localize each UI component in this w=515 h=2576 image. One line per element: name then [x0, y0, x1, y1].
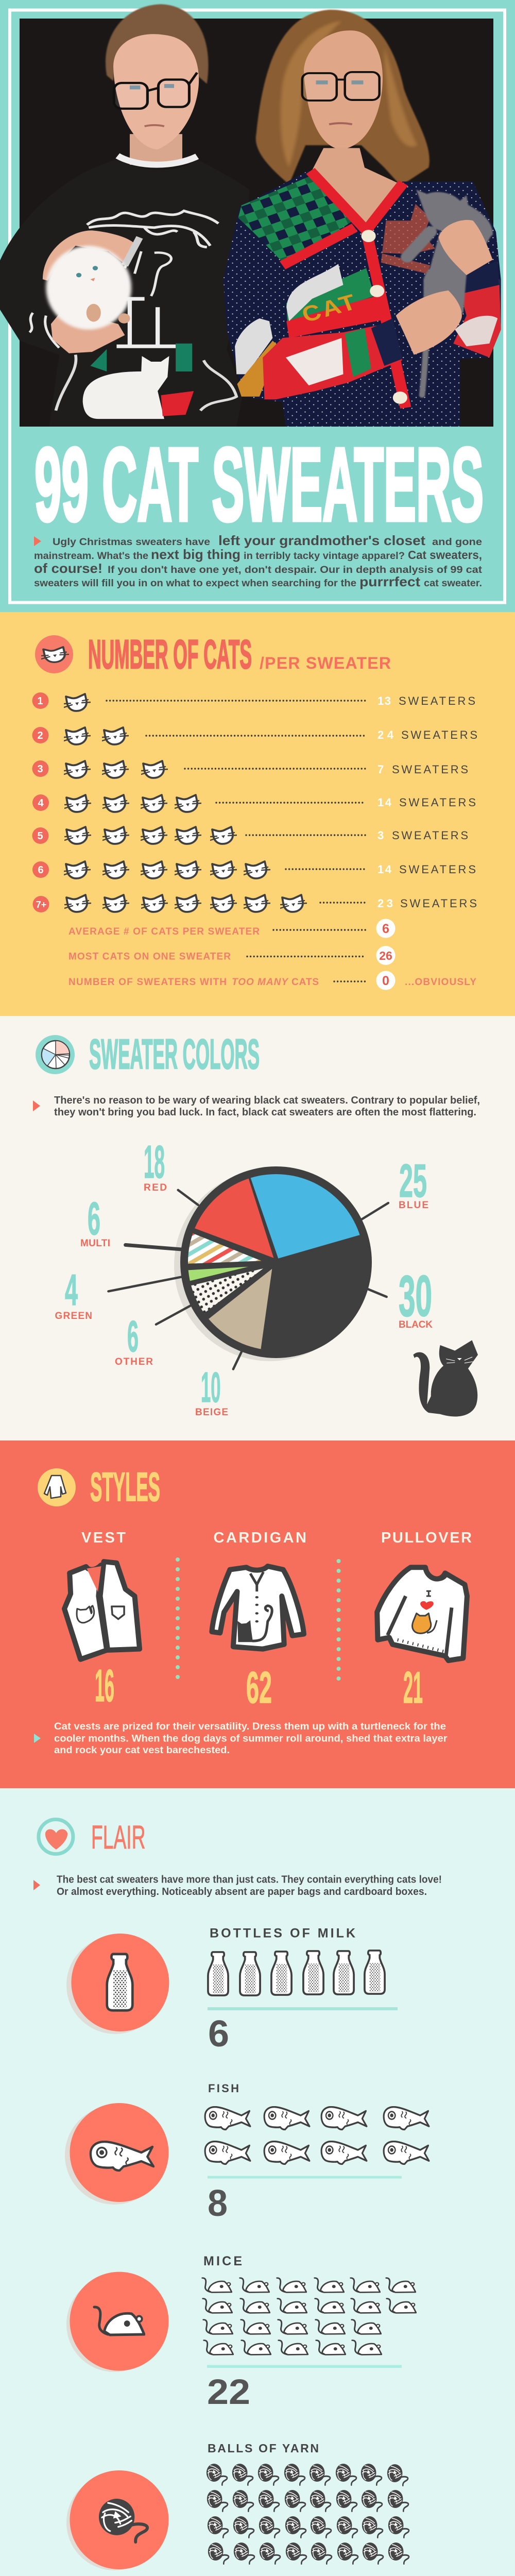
- frilly collar: [117, 156, 197, 165]
- style counts: 16: [95, 1660, 114, 1711]
- row: 2 cats: [32, 727, 477, 744]
- row: 1 cat: [32, 692, 475, 711]
- row: 4 cats: SWEATERS: [399, 796, 476, 809]
- sweater flourishes: [56, 354, 236, 411]
- CAT lettering: CAT: [298, 289, 361, 327]
- pie label: blue 25: BLUE: [399, 1200, 428, 1211]
- stat: average cats: [68, 919, 396, 938]
- pie label: green 4: GREEN: [55, 1311, 92, 1321]
- stat: most cats: [68, 946, 396, 965]
- icon: cardigan badge: [38, 1468, 76, 1506]
- panel: number of cats: [0, 612, 515, 1016]
- intro paragraph: Cat sweaters,: [408, 548, 482, 562]
- stat: most cats: MOST CATS ON ONE SWEATER: [68, 951, 231, 962]
- paragraph: flair: Or almost everything. Noticeably absent are paper bags and cardboard boxes.: [57, 1886, 427, 1897]
- row: 7+ cats: [33, 895, 477, 912]
- stat: too many cats: CATS: [291, 977, 319, 988]
- row: bottles of milk: BOTTLES OF MILK: [210, 1926, 355, 1940]
- stat: average cats: AVERAGE # OF CATS PER SWEATER: [68, 926, 260, 937]
- intro paragraph: mainstream. What's the: [34, 551, 148, 562]
- pie label: green 4: [55, 1266, 92, 1321]
- row: 6 cats: [32, 861, 476, 878]
- row: mice: 22: [207, 2372, 250, 2412]
- panel: styles: 21: [403, 1663, 423, 1713]
- paragraph: vests: [54, 1721, 448, 1756]
- stat: too many cats: [68, 971, 476, 990]
- pie label: red 18: [144, 1137, 167, 1193]
- leader lines: [108, 1190, 388, 1369]
- style counts: 62: [246, 1663, 272, 1713]
- plush white cat: [46, 246, 131, 330]
- row: balls of yarn: [66, 2442, 409, 2576]
- row: bottles of milk: [66, 1926, 398, 2055]
- sweater greenery: [90, 344, 192, 371]
- pie label: other 6: OTHER: [115, 1357, 153, 1367]
- intro paragraph: [34, 533, 483, 589]
- heading: flair: FLAIR: [91, 1819, 145, 1856]
- panel: flair: [0, 1788, 515, 2576]
- paragraph: black sweaters: There's no reason to be wary of wearing black cat sweaters. Contrary to popular belief,: [54, 1095, 480, 1106]
- panel: sweater colors: SWEATER COLORS: [89, 1031, 260, 1078]
- row: 5 cats: 5: [37, 831, 43, 842]
- panel: sweater colors: 18: [144, 1137, 165, 1188]
- intro paragraph: cat sweater.: [424, 578, 482, 589]
- pie label: red 18: RED: [144, 1182, 167, 1193]
- row: mice: MICE: [203, 2254, 242, 2268]
- panel: sweater colors: [0, 1016, 515, 1440]
- left man hair: [106, 4, 209, 84]
- row: fish: 8: [208, 2183, 228, 2224]
- row: 1 cat: 1: [37, 696, 43, 707]
- plush paws and face: [87, 304, 101, 321]
- row: 4 cats: 14: [377, 796, 392, 809]
- column titles: VEST: [81, 1530, 126, 1546]
- row: 3 cats: 3: [37, 764, 43, 775]
- panel: number of cats: NUMBER OF CATS: [88, 631, 252, 677]
- row: 7+ cats: 23: [377, 897, 393, 910]
- icon: arrow: [33, 1100, 40, 1111]
- intro paragraph: next big thing: [151, 547, 241, 562]
- navy cuff: [371, 318, 402, 366]
- intro paragraph: If you don't have one yet, don't despair. Our in depth analysis of 99 cat: [108, 565, 483, 575]
- sleeve white cat: [235, 318, 272, 374]
- stat: too many cats: 0: [382, 974, 389, 988]
- column titles: [81, 1530, 472, 1546]
- stat: most cats: 26: [379, 949, 392, 962]
- plaid yoke: [238, 176, 353, 265]
- right man eyes and mouth: [316, 80, 364, 84]
- column titles: CARDIGAN: [213, 1530, 306, 1546]
- row: mice: [66, 2254, 416, 2412]
- pie label: black 30: BLACK: [399, 1319, 433, 1330]
- row: 3 cats: 7: [377, 763, 384, 776]
- subheading: per sweater: /PER SWEATER: [260, 654, 391, 672]
- row: 5 cats: SWEATERS: [392, 829, 468, 842]
- intro paragraph: left your grandmother's closet: [218, 533, 425, 548]
- pie label: beige 10: BEIGE: [195, 1407, 228, 1418]
- pie label: beige 10: [195, 1363, 228, 1418]
- icon: pie badge: [36, 1035, 75, 1074]
- row: 7+ cats: 7+: [36, 900, 46, 910]
- style counts: [95, 1660, 423, 1713]
- pie label: black 30: 30: [399, 1264, 432, 1328]
- photo: two men in cat sweaters: [0, 4, 501, 427]
- intro paragraph: and gone: [432, 537, 482, 548]
- pie label: blue 25: 25: [399, 1155, 427, 1207]
- paragraph: vests: cooler months. When the dog days of summer roll around, shed that extra layer: [54, 1733, 448, 1744]
- right man hair: [256, 10, 430, 185]
- left man glasses: [114, 73, 197, 109]
- row: 5 cats: [32, 827, 468, 844]
- row: 3 cats: SWEATERS: [392, 763, 468, 776]
- right man face: [304, 30, 383, 149]
- icon: intro arrow: [34, 536, 41, 546]
- paragraph: flair: The best cat sweaters have more than just cats. They contain everything cats love!: [57, 1874, 442, 1886]
- left man neck: [130, 134, 182, 165]
- row: 4 cats: [32, 794, 476, 812]
- row: fish: FISH: [208, 2082, 239, 2095]
- intro paragraph: sweaters will fill you in on what to expect when searching for the: [34, 578, 356, 589]
- buttons: [362, 230, 376, 242]
- pie label: multi 6: [80, 1193, 110, 1249]
- dividers: [178, 1560, 339, 1679]
- paragraph: vests: Cat vests are prized for their versatility. Dress them up with a turtleneck for the: [54, 1721, 446, 1732]
- grey kitten: [407, 190, 493, 395]
- stat: too many cats: NUMBER OF SWEATERS WITH: [68, 977, 227, 988]
- pie label: other 6: 6: [127, 1312, 139, 1361]
- left man eyes and mouth: [130, 86, 174, 88]
- intro paragraph: of course!: [34, 561, 102, 576]
- right man hair highlight: [281, 21, 417, 167]
- icon: cat head badge: [35, 635, 73, 673]
- icon: vest: [64, 1562, 140, 1659]
- stat: too many cats: ...OBVIOUSLY: [405, 977, 476, 988]
- pie chart: [108, 1120, 417, 1391]
- paragraph: flair: [57, 1874, 442, 1897]
- row: fish: [65, 2082, 429, 2224]
- paragraph: black sweaters: they won't bring you bad luck. In fact, black cat sweaters are often the most flattering.: [54, 1107, 476, 1118]
- column titles: PULLOVER: [381, 1530, 472, 1546]
- cardigan body: [224, 171, 501, 427]
- icon: cardigan: [212, 1566, 304, 1649]
- row: 1 cat: SWEATERS: [399, 694, 475, 707]
- row: 2 cats: SWEATERS: [401, 728, 477, 741]
- sweater white cat: [83, 356, 169, 419]
- pie label: multi 6: MULTI: [80, 1238, 110, 1249]
- white frame: [10, 10, 505, 603]
- icon: arrow: [33, 1880, 40, 1890]
- icon: heart badge: [39, 1820, 73, 1854]
- red knit sleeve: [263, 324, 402, 399]
- row: 3 cats: [32, 760, 468, 778]
- panel: styles: [0, 1440, 515, 1788]
- paragraph: black sweaters: [54, 1095, 480, 1118]
- right man chest: [312, 148, 401, 226]
- intro paragraph: in terribly tacky vintage apparel?: [244, 551, 405, 562]
- pie label: black 30: [399, 1264, 433, 1330]
- watch: [125, 238, 140, 265]
- row: 6 cats: SWEATERS: [399, 863, 476, 876]
- lower hand: [396, 291, 462, 354]
- row: 7+ cats: SWEATERS: [400, 897, 477, 910]
- row: bottles of milk: 6: [208, 2013, 229, 2055]
- lower hand: [51, 310, 125, 353]
- row: 1 cat: 13: [377, 694, 391, 707]
- icon: pullover: [377, 1567, 467, 1660]
- red placket: [283, 171, 406, 408]
- intro paragraph: purrrfect: [359, 574, 420, 589]
- icon: arrow: [34, 1734, 41, 1743]
- orange knit motif: [380, 204, 435, 274]
- upper hand: [438, 220, 493, 275]
- pie label: multi 6: 6: [88, 1193, 100, 1245]
- row: balls of yarn: BALLS OF YARN: [208, 2442, 319, 2455]
- stat: average cats: 6: [382, 922, 389, 936]
- panel: styles: STYLES: [90, 1464, 160, 1510]
- row: 2 cats: 24: [377, 728, 394, 741]
- row: 2 cats: 2: [37, 730, 43, 741]
- row: 6 cats: 6: [38, 865, 44, 876]
- row: 4 cats: 4: [38, 798, 44, 809]
- pie label: blue 25: [399, 1155, 428, 1211]
- cardigan cat graphic: [286, 264, 344, 321]
- stat: too many cats: TOO MANY: [232, 977, 289, 988]
- top hand: [43, 230, 136, 281]
- icon: black cat: [413, 1340, 478, 1416]
- right sleeve knit: [453, 279, 501, 358]
- left man sweater: [0, 228, 20, 341]
- paragraph: vests: and rock your cat vest barechested.: [54, 1744, 230, 1756]
- pie label: other 6: [115, 1312, 153, 1367]
- sweater red pot: [161, 391, 194, 416]
- panel: header: [0, 0, 515, 612]
- pie label: green 4: 4: [65, 1266, 78, 1315]
- CAT band: [286, 268, 374, 324]
- left man face: [113, 34, 199, 149]
- row: 6 cats: 14: [377, 863, 392, 876]
- sleeve pattern: [29, 251, 171, 348]
- yellow stripes at sleeve: [237, 341, 279, 397]
- row: 5 cats: 3: [377, 829, 384, 842]
- sweater window: [116, 299, 176, 346]
- intro paragraph: Ugly Christmas sweaters have: [53, 537, 210, 548]
- decorative band: [87, 211, 218, 247]
- pie label: beige 10: 10: [201, 1363, 220, 1411]
- right man glasses: [302, 72, 380, 100]
